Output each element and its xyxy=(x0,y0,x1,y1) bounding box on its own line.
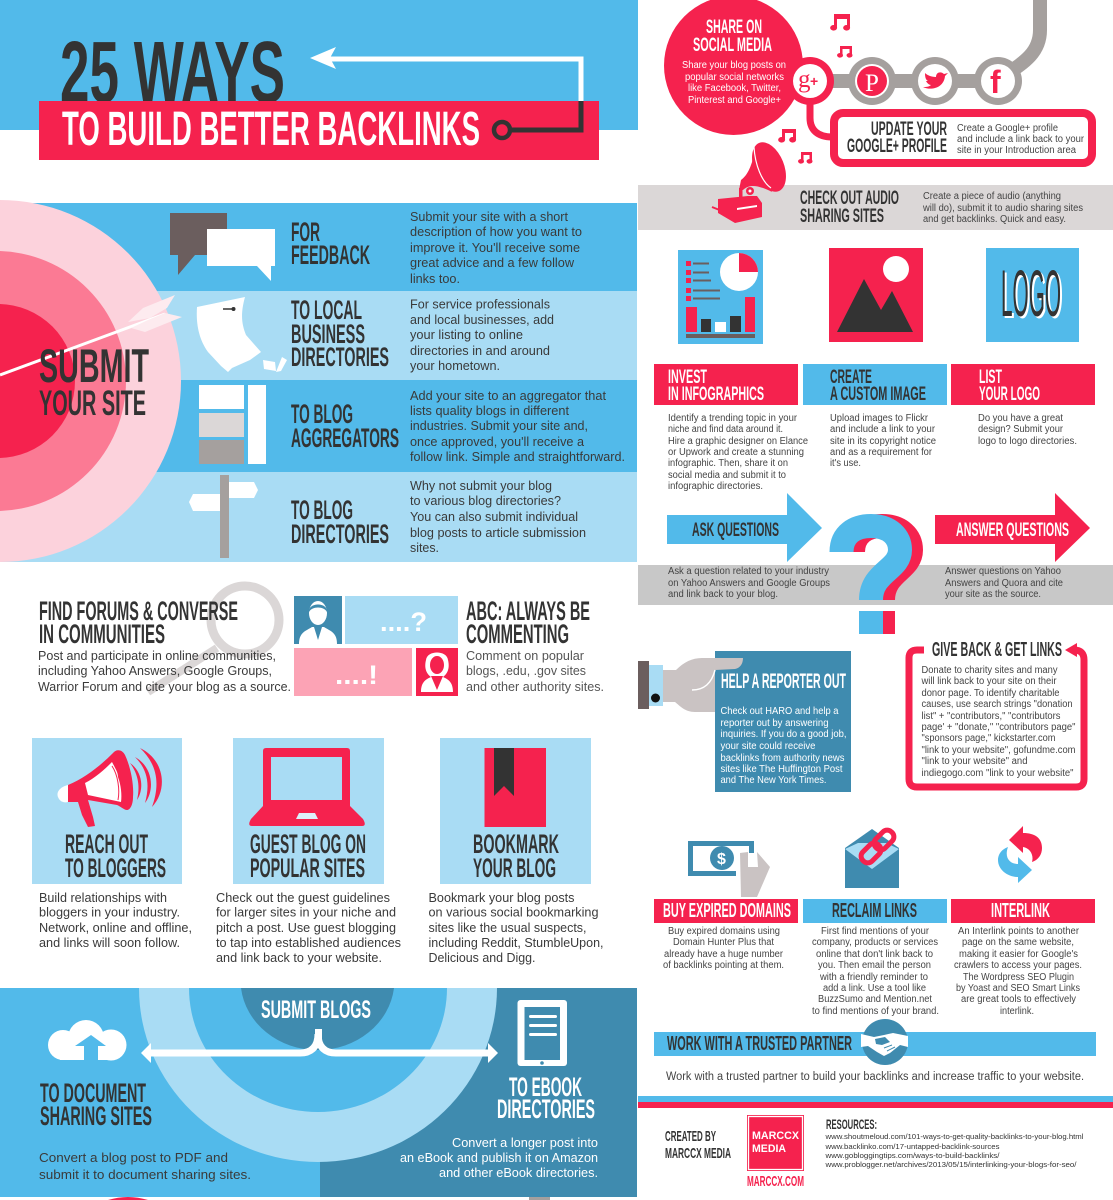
column: custom image: A CUSTOM IMAGE xyxy=(830,384,926,405)
arrow: ask questions: ASK QUESTIONS xyxy=(692,520,779,541)
heading: always be commenting xyxy=(466,596,590,649)
text: ebook: an eBook and publish it on Amazon xyxy=(400,1150,598,1165)
text: reach out: bloggers in your industry. xyxy=(39,904,180,920)
text: interlink: are great tools to effectively xyxy=(961,994,1076,1005)
column: interlink xyxy=(951,826,1095,1017)
heading: to blog directories: DIRECTORIES xyxy=(291,519,389,549)
text: help a reporter: inquiries. If you do a good job, xyxy=(720,729,846,740)
heading: submit your site: SUBMIT xyxy=(39,339,149,392)
panel: work with a trusted partner: WORK WITH A TRUSTED PARTNER xyxy=(667,1033,852,1055)
text: feedback: Submit your site with a short xyxy=(410,209,568,224)
text: reclaim links: BuzzSumo and Mention.net xyxy=(818,994,932,1005)
heading: to ebook directories: TO EBOOK xyxy=(509,1072,582,1102)
text: give back: "link to your website", gofundme.com xyxy=(922,745,1076,756)
text: help a reporter xyxy=(720,706,846,786)
text: give back: list" + "contributors," "contributors xyxy=(922,711,1060,722)
text: custom image: and include a link to your xyxy=(830,424,936,435)
text: audio sharing: and get backlinks. Quick and easy. xyxy=(923,214,1066,225)
heading: to local business directories: DIRECTORIES xyxy=(291,342,389,372)
text: aggregators xyxy=(410,388,625,464)
arrow: ask questions xyxy=(667,493,822,562)
text: give back: indiegogo.com "link to your website" xyxy=(922,768,1074,779)
text: help a reporter: backlinks from authority news xyxy=(720,753,844,764)
heading: find forums: IN COMMUNITIES xyxy=(39,619,165,649)
text: help a reporter: and The New York Times. xyxy=(720,775,826,786)
icon: question mark xyxy=(842,526,911,634)
text: give back: page' + "donate," "contributors page" xyxy=(922,722,1076,733)
text: expired domains: of backlinks pointing at them. xyxy=(663,960,784,971)
text: feedback: description of how you want to xyxy=(410,224,582,239)
heading: update profile: UPDATE YOUR xyxy=(871,119,947,140)
icon: facebook xyxy=(974,57,1022,105)
arrow: answer questions xyxy=(935,493,1090,562)
heading: to document sharing sites: TO DOCUMENT xyxy=(40,1078,146,1108)
heading: to document sharing sites: SHARING SITES xyxy=(40,1101,152,1131)
heading: for feedback: FEEDBACK xyxy=(291,240,370,270)
speech block: exclamation: ....! xyxy=(335,660,378,690)
text: interlink: by Yoast and SEO Smart Links xyxy=(956,983,1080,994)
text: give back: donor page. To identify charitable xyxy=(922,688,1060,699)
heading: to local business directories xyxy=(291,295,389,372)
arrow: title connector xyxy=(310,47,581,138)
icon: speech bubbles xyxy=(170,213,275,281)
text: infographics: niche and find data around it. xyxy=(668,424,783,435)
text: infographics: Identify a trending topic in your xyxy=(668,413,798,424)
heading: help a reporter out: HELP A REPORTER OUT xyxy=(721,670,846,693)
icon: envelope and chain xyxy=(845,828,899,888)
icon: signpost xyxy=(189,475,258,558)
concentric rings xyxy=(139,988,497,1162)
panel: audio sharing xyxy=(638,137,1113,230)
text: reclaim links xyxy=(812,926,939,1017)
column: list your logo: YOUR LOGO xyxy=(979,384,1040,405)
text: ask questions: and link back to your blog. xyxy=(668,589,778,600)
column: invest in infographics: IN INFOGRAPHICS xyxy=(668,384,764,405)
text: reclaim links: you. Then email the person xyxy=(818,960,931,971)
speech block: question xyxy=(345,596,458,644)
speech block: exclamation xyxy=(294,648,412,696)
card: reach out to bloggers xyxy=(32,738,182,884)
text: ask questions: on Yahoo Answers and Google Groups xyxy=(668,578,830,589)
icon: book xyxy=(484,748,546,827)
logo: marccx media: MEDIA xyxy=(752,1143,786,1155)
text: infographics: Hire a graphic designer on Elance xyxy=(668,436,808,447)
text: help a reporter: your site could receive xyxy=(720,741,816,752)
text: interlink: The Wordpress SEO Plugin xyxy=(963,972,1074,983)
text: trusted partner: Work with a trusted partner to build your backlinks and increase traffic to your website. xyxy=(666,1071,1084,1083)
text: bookmark xyxy=(428,890,604,965)
text: forums: Warrior Forum and cite your blog as a source. xyxy=(38,679,291,694)
text: give back: will link back to your site on their xyxy=(921,676,1057,687)
heading: find forums: FIND FORUMS & CONVERSE xyxy=(39,596,238,626)
text: commenting: Comment on popular xyxy=(466,648,585,663)
text: infographics: social media and submit it to xyxy=(668,470,786,481)
text: audio sharing: will do), submit it to audio sharing sites xyxy=(922,203,1083,214)
text: social: Pinterest and Google+ xyxy=(688,95,781,106)
panel: forums and commenting xyxy=(38,586,604,696)
text: commenting xyxy=(466,648,604,694)
panel: share on social media xyxy=(664,0,1040,164)
text: help a reporter: reporter out by answering xyxy=(720,718,828,729)
text: answer questions: your site as the source. xyxy=(945,589,1041,600)
text: feedback: great advice and a few follow xyxy=(410,255,575,270)
text: aggregators: industries. Submit your site and, xyxy=(410,418,588,433)
credits: created by: MARCCX MEDIA xyxy=(665,1145,731,1162)
text: infographics: infographic directories. xyxy=(668,481,763,492)
text: custom image: and as a requirement for xyxy=(830,447,933,458)
text: answer questions: Answer questions on Yahoo xyxy=(945,566,1061,577)
text: expired domains: Buy expired domains using xyxy=(668,926,780,937)
text: aggregators: Add your site to an aggregator that xyxy=(410,388,606,403)
card: guest blog: GUEST BLOG ON xyxy=(250,829,366,859)
text: update profile xyxy=(957,123,1085,156)
text: ask questions: Ask a question related to your industry xyxy=(668,566,829,577)
red circle xyxy=(664,0,803,135)
text: forums: including Yahoo Answers, Google Groups, xyxy=(38,663,272,678)
column: invest in infographics xyxy=(654,364,808,492)
icon: man avatar xyxy=(294,596,342,644)
text: guest blog: for larger sites in your niche and xyxy=(216,904,396,920)
text: aggregators: lists quality blogs in different xyxy=(410,403,569,418)
icon: money and hand xyxy=(690,844,770,897)
column: buy expired domains xyxy=(654,844,798,971)
credits: created by xyxy=(665,1128,731,1162)
icon: megaphone xyxy=(57,748,162,827)
text: give back: "sponsors page," kickstarter.com xyxy=(922,733,1056,744)
text: reach out: Network, online and offline, xyxy=(39,920,192,935)
panel: work with a trusted partner xyxy=(654,1019,1096,1083)
text: expired domains: Domain Hunter Plus that xyxy=(673,937,774,948)
text: guest blog: pitch a post. Use guest blogging xyxy=(216,920,396,935)
icon: facebook: f xyxy=(990,64,1001,100)
text: document sharing xyxy=(39,1150,251,1182)
text: ask questions xyxy=(668,566,830,600)
resources: www.shoutmeloud.com/101-ways-to-get-quality-backlinks-to-your-blog.html xyxy=(824,1132,1084,1141)
card: reach out to bloggers: TO BLOGGERS xyxy=(65,853,166,883)
text: interlink: interlink. xyxy=(1000,1006,1034,1017)
text: update profile: and include a link back to your xyxy=(957,134,1085,145)
icon: image xyxy=(829,248,923,342)
text: local directories xyxy=(410,296,554,373)
text: give back: Donate to charity sites and many xyxy=(922,665,1058,676)
text: ebook xyxy=(400,1135,598,1180)
title: 25 ways: 25 WAYS xyxy=(60,24,285,121)
icon: circular arrows xyxy=(998,826,1042,883)
arrow: double bracket xyxy=(141,1029,498,1063)
text: expired domains: already have a huge number xyxy=(664,949,784,960)
card: bookmark: YOUR BLOG xyxy=(473,853,556,883)
text: blog directories: sites. xyxy=(410,540,439,555)
logo: marccx media xyxy=(747,1115,804,1190)
heading: find forums xyxy=(39,596,238,649)
resources: RESOURCES: xyxy=(826,1116,877,1132)
text: social xyxy=(682,60,786,106)
icon: infographic xyxy=(678,250,763,344)
text: reclaim links: online that don't link back to xyxy=(816,949,933,960)
resources: www.problogger.net/archives/2013/05/15/interlinking-your-blogs-for-seo/ xyxy=(824,1160,1077,1169)
heading: to document sharing sites xyxy=(40,1078,152,1131)
icons: music notes xyxy=(778,14,853,164)
target xyxy=(0,200,181,562)
column: list your logo xyxy=(951,364,1095,447)
text: reclaim links: First find mentions of your xyxy=(821,926,930,937)
column: interlink: INTERLINK xyxy=(991,900,1050,922)
resources: www.gobloggingtips.com/ways-to-build-backlinks/ xyxy=(824,1151,1000,1160)
heading: submit blogs: SUBMIT BLOGS xyxy=(261,996,371,1024)
text: guest blog xyxy=(216,890,401,965)
icon: handshake xyxy=(861,1019,908,1065)
text: audio sharing: Create a piece of audio (anything xyxy=(923,191,1061,202)
text: document sharing: submit it to document sharing sites. xyxy=(39,1167,251,1182)
text: answer questions xyxy=(945,566,1063,600)
text: expired domains xyxy=(663,926,784,971)
text: feedback: links too. xyxy=(410,271,460,286)
icon: tablet xyxy=(518,1000,567,1066)
text: update profile: site in your Introduction area xyxy=(957,145,1076,156)
card: bookmark xyxy=(440,738,591,884)
column: buy expired domains: BUY EXPIRED DOMAINS xyxy=(663,900,791,922)
column: reclaim links: RECLAIM LINKS xyxy=(832,900,917,922)
text: blog directories: You can also submit individual xyxy=(410,509,578,524)
text: guest blog: and link back to your website. xyxy=(216,950,382,965)
heading: to blog aggregators: AGGREGATORS xyxy=(291,423,399,453)
footer stripes xyxy=(638,1096,1113,1108)
text: commenting: blogs, .edu, .gov sites xyxy=(466,663,586,678)
text: bookmark: including Reddit, StumbleUpon, xyxy=(428,935,604,950)
social path xyxy=(832,0,1040,81)
text: give back: causes, use search strings "donation xyxy=(922,699,1072,710)
text: reclaim links: company, products or services xyxy=(812,937,938,948)
text: update profile: Create a Google+ profile xyxy=(957,123,1058,134)
text: custom image: Upload images to Flickr xyxy=(830,413,929,424)
text: custom image: site in its copyright notice xyxy=(830,436,936,447)
text: guest blog: Check out the guest guidelines xyxy=(216,890,390,905)
icon: pointing hand xyxy=(638,658,743,712)
icon: google plus: g xyxy=(798,66,811,93)
subtitle: TO BUILD BETTER BACKLINKS xyxy=(62,103,480,156)
card: guest blog xyxy=(233,738,384,884)
text: bookmark: Bookmark your blog posts xyxy=(428,890,575,905)
heading: to blog aggregators xyxy=(291,399,399,453)
heading: always be commenting: COMMENTING xyxy=(466,619,569,649)
text: interlink: An Interlink points to another xyxy=(958,926,1080,937)
panel: update google profile xyxy=(810,103,1092,163)
text: blog directories: Why not submit your blog xyxy=(410,478,552,493)
column: list your logo: LIST xyxy=(979,367,1002,388)
heading: share on social media: SOCIAL MEDIA xyxy=(693,35,772,56)
heading: to ebook directories: DIRECTORIES xyxy=(497,1094,595,1124)
text: forums xyxy=(38,648,291,694)
text: aggregators: once approved, you'll receive a xyxy=(410,434,585,449)
text: give back xyxy=(921,665,1076,779)
heading: update profile: GOOGLE+ PROFILE xyxy=(847,136,947,157)
text: logo: design? Submit your xyxy=(978,424,1064,435)
text: feedback xyxy=(410,209,582,286)
icon: magnifier xyxy=(148,586,279,692)
heading: for feedback xyxy=(291,217,370,270)
text: custom image: it's use. xyxy=(830,458,861,469)
heading: for feedback: FOR xyxy=(291,217,320,247)
icon: money and hand: $ xyxy=(717,851,726,868)
text: social: Share your blog posts on xyxy=(682,60,786,71)
text: reclaim links: to find mentions of your brand. xyxy=(812,1006,939,1017)
text: commenting: and other authority sites. xyxy=(466,679,604,694)
arrow in target xyxy=(0,295,182,375)
heading: share on social media: SHARE ON xyxy=(706,17,762,38)
heading: to local business directories: TO LOCAL xyxy=(291,295,362,325)
icon: pinterest: P xyxy=(865,70,879,97)
heading: to local business directories: BUSINESS xyxy=(291,319,365,349)
heading: to ebook directories xyxy=(497,1072,595,1124)
resources xyxy=(824,1116,1084,1169)
text: bookmark: Delicious and Digg. xyxy=(428,950,536,965)
text: infographics xyxy=(668,413,808,492)
heading: always be commenting: ABC: ALWAYS BE xyxy=(466,596,590,626)
panel: submit your site xyxy=(0,200,637,562)
text: reclaim links: add a link. Use a tool like xyxy=(823,983,926,994)
icon: google plus xyxy=(786,57,834,105)
icon: google plus: + xyxy=(810,73,818,89)
heading: update profile xyxy=(847,119,947,157)
icon: aggregator blocks xyxy=(199,385,266,464)
panel: ask and answer questions xyxy=(638,493,1113,634)
column: custom image xyxy=(803,364,947,469)
card: reach out to bloggers: REACH OUT xyxy=(65,829,148,859)
text: interlink: crawlers to access your pages. xyxy=(954,960,1082,971)
icon: gramophone xyxy=(712,137,793,223)
column: reclaim links xyxy=(803,828,947,1017)
text: infographics: or Upwork and create a stunning xyxy=(668,447,804,458)
text: logo: logo to logo directories. xyxy=(978,436,1077,447)
icon: pinterest xyxy=(848,57,896,105)
text: local directories: directories in and around xyxy=(410,343,550,358)
text: guest blog: to tap into established audiences xyxy=(216,935,401,950)
text: audio sharing xyxy=(922,191,1083,225)
text: infographics: infographic. Then, share it on xyxy=(668,458,788,469)
text: blog directories: blog posts to article submission xyxy=(410,525,586,540)
text: logo xyxy=(978,413,1077,447)
resources: www.backlinko.com/17-untapped-backlink-sources xyxy=(824,1142,1000,1151)
text: reach out: Build relationships with xyxy=(39,890,167,905)
text: local directories: and local businesses, add xyxy=(410,312,554,327)
heading: submit your site xyxy=(39,339,149,423)
text: forums: Post and participate in online communities, xyxy=(38,648,276,663)
text: reclaim links: with a friendly reminder to xyxy=(819,972,928,983)
text: help a reporter: Check out HARO and help a xyxy=(720,706,839,717)
heading: audio sharing: CHECK OUT AUDIO xyxy=(800,188,899,209)
text: logo: Do you have a great xyxy=(978,413,1063,424)
text: bookmark: sites like the usual suspects, xyxy=(428,920,586,935)
text: interlink: page on the same website, xyxy=(962,937,1074,948)
heading: to blog directories: TO BLOG xyxy=(291,495,353,525)
text: custom image xyxy=(830,413,936,469)
text: social: popular social networks xyxy=(685,72,784,83)
logo: marccx media: MARCCX xyxy=(752,1130,800,1142)
text: local directories: your hometown. xyxy=(410,358,500,373)
heading: to blog aggregators: TO BLOG xyxy=(291,399,353,429)
panel: give back and get links xyxy=(909,639,1084,787)
heading: submit your site: YOUR SITE xyxy=(39,384,146,423)
column: custom image: CREATE xyxy=(830,367,872,388)
text: blog directories xyxy=(410,478,586,555)
icon: twitter xyxy=(911,57,959,105)
text: reach out: and links will soon follow. xyxy=(39,935,180,950)
heading: share on social media xyxy=(693,17,772,56)
text: local directories: your listing to online xyxy=(410,327,523,342)
text: interlink xyxy=(954,926,1082,1017)
icon: laptop xyxy=(249,748,365,826)
text: local directories: For service professionals xyxy=(410,296,550,312)
text: feedback: improve it. You'll receive some xyxy=(410,240,580,255)
heading: audio sharing xyxy=(800,188,899,227)
card: guest blog: POPULAR SITES xyxy=(250,853,365,883)
column: invest in infographics: INVEST xyxy=(668,367,707,388)
credits: created by: CREATED BY xyxy=(665,1128,716,1145)
panel: submit blogs xyxy=(0,988,637,1197)
text: aggregators: follow link. Simple and straightforward. xyxy=(410,449,625,464)
text: social: like Facebook, Twitter, xyxy=(688,83,781,94)
text: document sharing: Convert a blog post to PDF and xyxy=(39,1150,228,1165)
text: interlink: making it easier for Google's xyxy=(959,949,1078,960)
logo: marccx media: MARCCX.COM xyxy=(747,1173,804,1190)
text: help a reporter: sites like The Huffington Post xyxy=(720,764,843,775)
card: bookmark: BOOKMARK xyxy=(473,829,559,859)
icon: pinned paper xyxy=(197,297,287,372)
heading: to blog directories xyxy=(291,495,389,549)
icon: woman avatar xyxy=(416,648,458,696)
icon: cloud upload xyxy=(48,1020,126,1060)
icon: logo xyxy=(986,248,1079,342)
heading: audio sharing: SHARING SITES xyxy=(800,206,884,227)
text: give back: "link to your website" and xyxy=(922,756,1028,767)
text: bookmark: on various social bookmarking xyxy=(428,904,598,920)
title banner xyxy=(0,0,638,160)
text: ebook: and other eBook directories. xyxy=(439,1165,598,1180)
text: reach out xyxy=(39,890,192,950)
text: blog directories: to various blog directories? xyxy=(410,493,561,508)
speech block: question: ....? xyxy=(380,607,427,637)
text: ebook: Convert a longer post into xyxy=(452,1135,598,1150)
panel: help a reporter out xyxy=(638,651,851,792)
text: answer questions: Answers and Quora and cite xyxy=(945,578,1063,589)
